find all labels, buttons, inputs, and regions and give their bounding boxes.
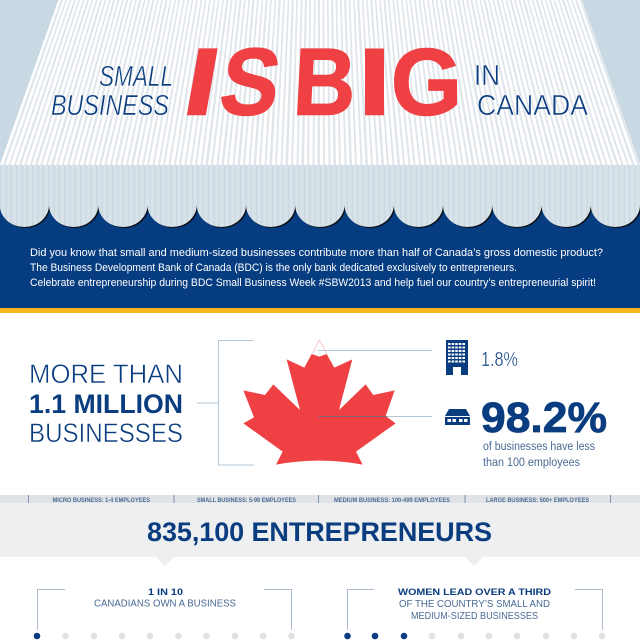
icon: maple leaf xyxy=(243,340,396,465)
yellow divider xyxy=(0,308,640,313)
awning scalloped valance xyxy=(0,165,640,228)
title: in canada: IN xyxy=(474,60,500,92)
title: small business: SMALL xyxy=(99,61,173,93)
title: is big xyxy=(176,29,462,136)
panel: women lead: OF THE COUNTRY’S SMALL AND xyxy=(399,599,550,610)
business size strip: MEDIUM BUSINESS: 100-499 EMPLOYEES xyxy=(334,497,451,504)
caption: businesses under 100 employees xyxy=(483,441,595,469)
icon: shop xyxy=(445,409,470,425)
intro text: Did you know that small and medium-sized businesses contribute more than half of Canada’s gross domestic product? xyxy=(30,247,603,259)
caption: businesses under 100 employees: of businesses have less xyxy=(483,441,595,453)
panel: 1 in 10: 1 IN 10 xyxy=(148,587,183,598)
panel: 1 in 10: CANADIANS OWN A BUSINESS xyxy=(94,598,236,610)
dots: one of ten xyxy=(34,633,295,639)
title: in canada xyxy=(474,60,589,122)
panel: entrepreneurs heading: 835,100 ENTREPRENEURS xyxy=(147,517,492,547)
leader line to 98.2% xyxy=(318,416,432,418)
title: small business: BUSINESS xyxy=(51,90,170,122)
panel: entrepreneurs heading xyxy=(0,503,640,566)
panel: 1 in 10 xyxy=(34,587,295,639)
leader line to 1.8% xyxy=(318,350,432,352)
title: is big: I xyxy=(176,29,228,135)
business size strip: SMALL BUSINESS: 5-99 EMPLOYEES xyxy=(197,497,297,504)
title xyxy=(51,29,589,136)
icon: office building xyxy=(446,340,468,375)
dots: three of ten xyxy=(344,633,605,639)
text: 1.8%: 1.8% xyxy=(481,349,518,371)
awning roof with converging stripes xyxy=(0,0,640,165)
headline: more than 1.1 million businesses: MORE THAN xyxy=(29,359,183,389)
business size strip xyxy=(0,495,640,504)
stat: 98.2%: 98.2% xyxy=(481,394,607,442)
panel: women lead: WOMEN LEAD OVER A THIRD xyxy=(398,587,551,598)
title: is big: B xyxy=(291,30,358,135)
headline: more than 1.1 million businesses: BUSINESSES xyxy=(29,418,183,448)
caption: businesses under 100 employees: than 100 employees xyxy=(483,457,580,469)
intro text: The Business Development Bank of Canada (BDC) is the only bank dedicated exclusively to entrepreneurs. xyxy=(30,262,517,274)
intro text xyxy=(30,247,603,289)
headline: more than 1.1 million businesses xyxy=(29,359,183,448)
intro text: Celebrate entrepreneurship during BDC Small Business Week #SBW2013 and help fuel our country’s entrepreneurial spirit! xyxy=(30,277,596,289)
title: in canada: CANADA xyxy=(477,90,589,122)
title: is big: I xyxy=(358,30,391,136)
title: is big: S xyxy=(214,30,287,135)
blue intro band xyxy=(0,195,640,308)
business size strip: LARGE BUSINESS: 500+ EMPLOYEES xyxy=(486,497,590,504)
business size strip: MICRO BUSINESS: 1-4 EMPLOYEES xyxy=(52,497,151,504)
background sky xyxy=(0,0,640,170)
title: small business xyxy=(51,61,173,122)
bracket xyxy=(197,340,254,465)
panel: women lead xyxy=(344,587,605,639)
headline: more than 1.1 million businesses: 1.1 MILLION xyxy=(29,389,183,419)
title: is big: G xyxy=(391,30,462,136)
panel: women lead: MEDIUM-SIZED BUSINESSES xyxy=(411,611,538,622)
